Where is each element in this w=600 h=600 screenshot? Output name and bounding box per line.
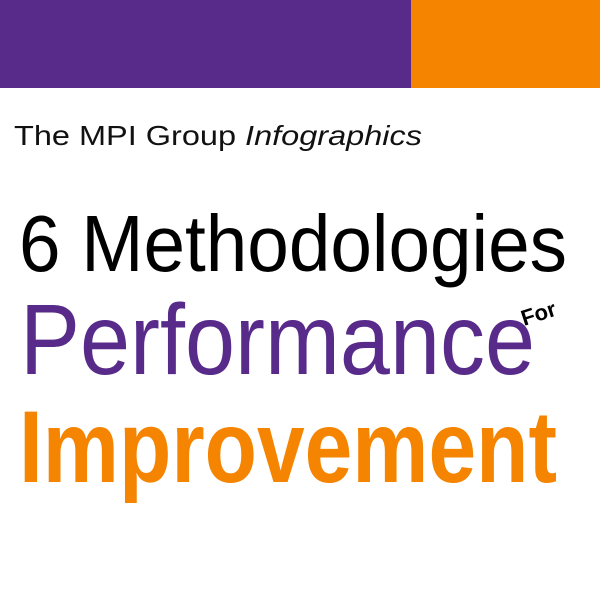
heading: 6 Methodologies: 6 Methodologies [19,199,567,288]
label: For: For [518,296,560,331]
top bar: purple [0,0,411,88]
top bar: orange [411,0,600,88]
subtitle: The MPI Group Infographics: The MPI Group Infographics [14,120,422,151]
heading: Performance: Performance [20,284,535,396]
